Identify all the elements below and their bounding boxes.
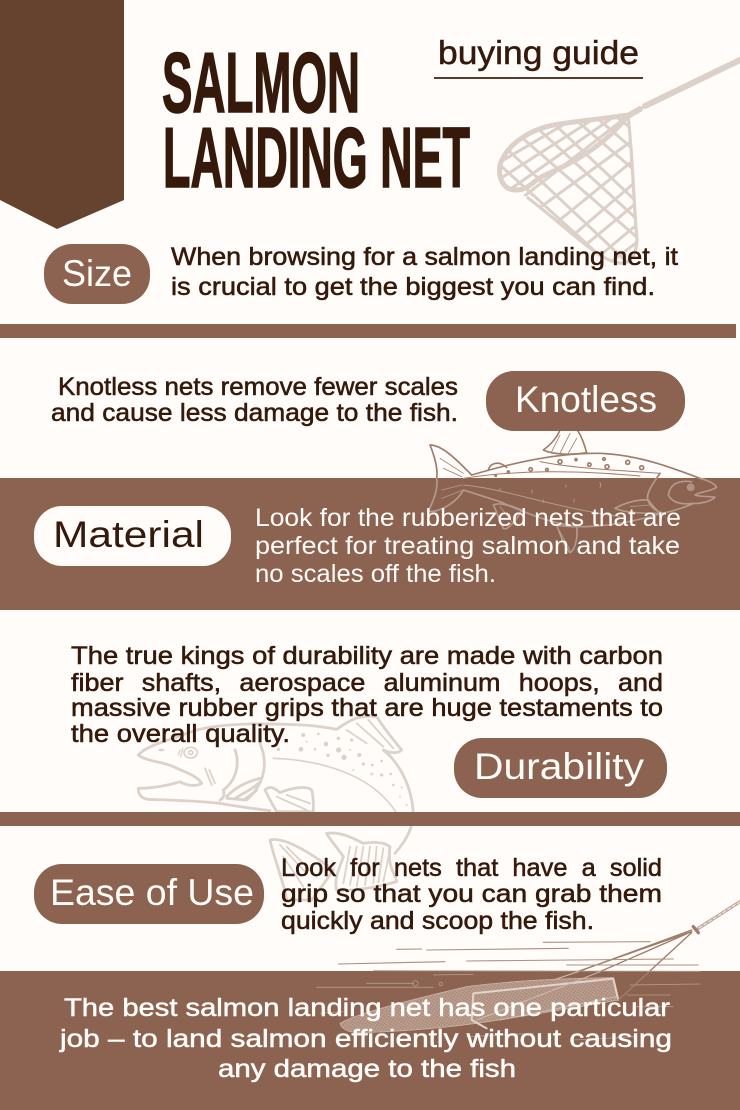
text: size description: When browsing for a salmon landing net, it (171, 243, 678, 271)
illustration: net in water (317, 902, 740, 1040)
divider bar: middle (0, 812, 740, 826)
illustration: salmon band overlay (428, 426, 717, 553)
pill: Material: Material (53, 514, 204, 555)
title: LANDING NET (163, 111, 470, 206)
text: size description (171, 243, 678, 301)
panel: material band (0, 478, 740, 610)
text: durability description: The true kings of durability are made with carbon (71, 642, 663, 670)
pill: Ease of Use: Ease of Use (50, 872, 254, 913)
pill: Size: Size (62, 253, 132, 294)
title: SALMON (162, 36, 360, 131)
pill: Material (34, 506, 231, 566)
text: material description: no scales off the fish. (255, 560, 496, 588)
text: size description: is crucial to get the biggest you can find. (171, 273, 655, 301)
text: conclusion: The best salmon landing net has one particular (64, 994, 670, 1022)
pill: Durability (454, 738, 667, 798)
pill: Knotless: Knotless (515, 379, 657, 420)
illustration: leaping salmon (138, 716, 413, 900)
pill: Durability: Durability (474, 746, 645, 787)
text: material description (255, 504, 681, 588)
illustration: salmon side view (429, 431, 702, 478)
pill: Size (44, 244, 150, 304)
title (162, 36, 470, 206)
subtitle: buying guide: buying guide (438, 34, 639, 71)
divider bar: top (0, 324, 736, 338)
text: knotless description (51, 373, 458, 427)
text: ease of use description (281, 854, 662, 935)
text: knotless description: and cause less damage to the fish. (51, 399, 458, 427)
ribbon banner (0, 0, 124, 229)
text: durability description: fiber shafts, aerospace aluminum hoops, and (71, 669, 663, 697)
text: material description: perfect for treating salmon and take (255, 532, 680, 560)
text: conclusion: any damage to the fish (218, 1055, 516, 1083)
text: conclusion (59, 994, 672, 1083)
text: ease of use description: Look for nets that have a solid (281, 854, 662, 882)
illustration: landing net (495, 60, 740, 270)
text: durability description: massive rubber grips that are huge testaments to (71, 694, 663, 722)
pill: Ease of Use (34, 864, 264, 924)
text: material description: Look for the rubberized nets that are (255, 504, 681, 532)
panel: conclusion band (0, 971, 740, 1110)
text: ease of use description: grip so that you can grab them (281, 880, 662, 908)
text: ease of use description: quickly and scoop the fish. (281, 907, 594, 935)
text: durability description: the overall quality. (71, 720, 290, 748)
text: conclusion: job – to land salmon efficiently without causing (59, 1025, 672, 1053)
pill: Knotless (486, 371, 685, 431)
text: knotless description: Knotless nets remove fewer scales (58, 373, 458, 401)
text: durability description (71, 642, 663, 748)
